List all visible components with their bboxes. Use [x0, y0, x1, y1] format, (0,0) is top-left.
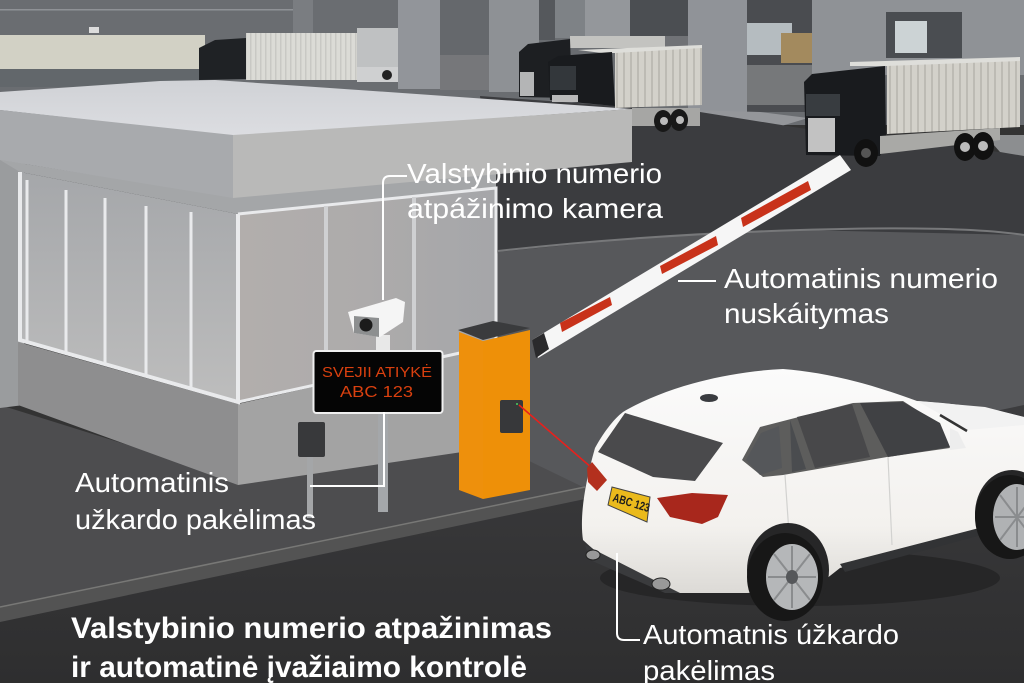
- label: gate raise left: [75, 467, 316, 535]
- rear diffuser: [585, 545, 680, 593]
- truck: right: [804, 57, 1020, 167]
- ground: rear road: [480, 96, 1024, 252]
- booth wall side: [0, 155, 24, 408]
- door lines: [785, 457, 892, 548]
- licence plate: ABC 123: [611, 490, 652, 515]
- label: gate raise right: [643, 619, 899, 683]
- truck: middle back: [519, 36, 665, 98]
- camera: [348, 298, 405, 351]
- leader: boom label: [678, 280, 716, 282]
- booth: [0, 80, 632, 485]
- mullions: [20, 172, 496, 402]
- licence plate: [608, 487, 652, 522]
- label: gate raise left: Automatinis: [75, 467, 229, 498]
- tail lights: [587, 462, 607, 491]
- leader: car: [617, 553, 640, 640]
- title: Valstybinio numerio atpažinimas: [71, 612, 552, 645]
- label: gate raise right: Automatnis úžkardo: [643, 619, 899, 650]
- front wheel: [975, 470, 1024, 559]
- LED sign: [314, 351, 442, 413]
- booth right glazing: [238, 188, 496, 402]
- barrier arm: [532, 155, 851, 358]
- booth left glazing: [20, 172, 238, 402]
- rear wheel: [747, 523, 829, 621]
- camera pole: [378, 176, 407, 512]
- label: automatic reading: [724, 263, 998, 329]
- roof top: [0, 80, 632, 136]
- car: [582, 369, 1024, 621]
- barrier cabinet: [458, 321, 530, 499]
- car shadow: [600, 550, 1000, 606]
- booth base: [18, 342, 238, 485]
- LED sign: SVEJII ATIYKĖ: [322, 363, 432, 381]
- kerb: [0, 487, 585, 622]
- label: automatic reading: nuskáitymas: [724, 298, 889, 329]
- booth soffit: [0, 160, 496, 214]
- ground: forecourt asphalt: [440, 230, 1024, 490]
- car antenna: [700, 394, 718, 402]
- car side window frame: [742, 401, 950, 477]
- label: camera: atpážinimo kamera: [407, 193, 663, 224]
- roof left fascia: [0, 110, 233, 198]
- label: camera: Valstybinio numerio: [407, 158, 662, 189]
- label: gate raise left: užkardo pakėlimas: [75, 504, 316, 535]
- background: warehouse: [0, 0, 1024, 127]
- car body: [582, 369, 1024, 593]
- car rear window: [598, 413, 723, 481]
- roof front fascia: [233, 109, 632, 198]
- laser beam: [519, 405, 614, 487]
- ground: pavement by booth: [0, 405, 585, 610]
- side sill: [840, 527, 985, 572]
- truck: middle: [548, 45, 702, 132]
- title: [71, 612, 552, 683]
- leader: gate raise: [310, 412, 384, 486]
- label: camera: [407, 158, 663, 224]
- car mirror: [950, 428, 966, 450]
- LED sign: ABC 123: [340, 384, 413, 401]
- ground: lower road: [0, 405, 1024, 683]
- truck: far left: [199, 28, 398, 82]
- RFID reader post: [298, 422, 325, 518]
- label: automatic reading: Automatinis numerio: [724, 263, 998, 294]
- car bonnet: [917, 401, 1024, 430]
- car side windows: [746, 426, 782, 475]
